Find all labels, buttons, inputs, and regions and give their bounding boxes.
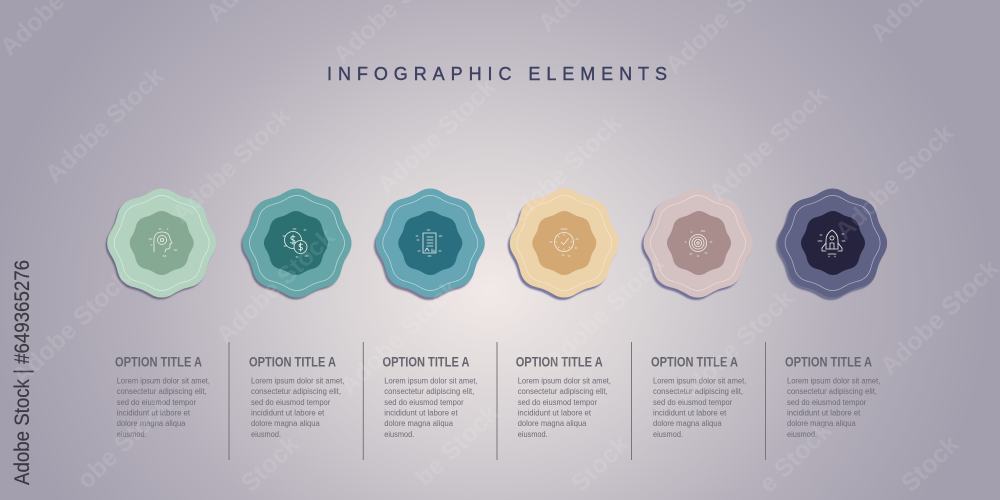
- watermarks: be Stock: [410, 399, 504, 492]
- text block: option 2: [249, 354, 344, 439]
- watermarks: Adobe Stock: [372, 73, 501, 199]
- divider lines: [229, 342, 766, 460]
- watermarks: Adobe Stock: [211, 223, 340, 349]
- text block: option 5: Lorem ipsum dolor sit amet,: [653, 376, 746, 386]
- watermarks: e Stock: [754, 416, 837, 498]
- text block: option 1: eiusmod.: [117, 429, 147, 439]
- text block: option 5: sed do eiusmod tempor: [653, 397, 732, 407]
- text block: option 4: Lorem ipsum dolor sit amet,: [518, 376, 611, 386]
- text block: option 6: OPTION TITLE A: [785, 354, 872, 370]
- text block: option 6: eiusmod.: [787, 429, 817, 439]
- text block: option 6: incididunt ut labore et: [787, 408, 861, 418]
- text block: option 3: Lorem ipsum dolor sit amet,: [384, 376, 478, 386]
- watermarks: Adobe Stock: [670, 284, 799, 410]
- watermarks: Adobe Stock: [40, 62, 169, 188]
- stock id side label: Adobe Stock | #649365276: [11, 260, 34, 485]
- text block: option 5: consectetur adipiscing elit,: [653, 386, 743, 396]
- text block: option 3: dolore magna aliqua: [384, 418, 453, 428]
- icon: document: [416, 230, 442, 256]
- badge 3: document: [374, 188, 485, 300]
- badge 2: coins: [241, 188, 352, 300]
- watermarks: Adobe Stock: [498, 109, 627, 235]
- text block: option 6: dolore magna aliqua: [787, 418, 856, 428]
- text block: option 1: Lorem ipsum dolor sit amet,: [117, 376, 210, 386]
- watermarks: Stock: [896, 430, 964, 498]
- text block: option 3: sed do eiusmod tempor: [384, 397, 464, 407]
- text block: option 2: dolore magna aliqua: [251, 418, 320, 428]
- title: INFOGRAPHIC ELEMENTS: [327, 64, 667, 84]
- text block: option 6: consectetur adipiscing elit,: [787, 386, 877, 396]
- watermarks: Adobe Stock: [167, 102, 296, 228]
- watermarks: Adobe Stock: [540, 249, 669, 375]
- text block: option 2: consectetur adipiscing elit,: [251, 386, 341, 396]
- text block: option 5: dolore magna aliqua: [653, 418, 722, 428]
- watermarks: Stock: [236, 430, 304, 498]
- text block: option 4: sed do eiusmod tempor: [518, 397, 597, 407]
- text block: option 1: incididunt ut labore et: [117, 408, 191, 418]
- text block: option 3: eiusmod.: [384, 429, 414, 439]
- text block: option 4: [516, 354, 611, 439]
- text block: option 1: dolore magna aliqua: [117, 418, 186, 428]
- text block: option 4: eiusmod.: [518, 429, 548, 439]
- text block: option 3: consectetur adipiscing elit,: [384, 386, 474, 396]
- text block: option 6: sed do eiusmod tempor: [787, 397, 866, 407]
- text block: option 6: [785, 354, 880, 439]
- text block: option 1: [115, 354, 210, 439]
- text block: option 4: incididunt ut labore et: [518, 408, 592, 418]
- text block: option 1: OPTION TITLE A: [115, 354, 202, 370]
- badge 5: target: [642, 188, 752, 300]
- text block: option 3: OPTION TITLE A: [382, 354, 470, 370]
- text block: option 2: eiusmod.: [251, 429, 281, 439]
- watermarks: obe Stock: [72, 391, 177, 494]
- text block: option 2: incididunt ut labore et: [251, 408, 325, 418]
- watermarks: Adobe Stock: [704, 81, 833, 207]
- badge 1: head with gear: [106, 188, 216, 300]
- text block: option 3: [382, 354, 478, 439]
- text block: option 1: sed do eiusmod tempor: [117, 397, 196, 407]
- icon: head with gear: [149, 229, 177, 256]
- watermarks: Adobe Stock: [7, 264, 136, 390]
- badge 4: clock: [508, 188, 619, 300]
- text block: option 3: incididunt ut labore et: [384, 408, 458, 418]
- badge 6: rocket: [776, 188, 887, 300]
- text block: option 4: OPTION TITLE A: [516, 354, 603, 370]
- text block: option 4: dolore magna aliqua: [518, 418, 587, 428]
- text block: option 5: [651, 354, 746, 439]
- watermarks: Adobe Stock: [335, 274, 464, 400]
- text block: option 6: Lorem ipsum dolor sit amet,: [787, 376, 880, 386]
- icon: target: [685, 231, 712, 256]
- watermarks: Adobe Stock: [830, 119, 959, 245]
- text block: option 5: incididunt ut labore et: [653, 408, 727, 418]
- icon: rocket: [818, 230, 845, 257]
- text block: option 5: OPTION TITLE A: [651, 354, 738, 370]
- text block: option 5: eiusmod.: [653, 429, 683, 439]
- watermarks: Stock: [566, 430, 634, 498]
- text block: option 2: Lorem ipsum dolor sit amet,: [251, 376, 344, 386]
- text block: option 2: sed do eiusmod tempor: [251, 397, 330, 407]
- icon: coins: [283, 229, 308, 257]
- text block: option 1: consectetur adipiscing elit,: [117, 386, 207, 396]
- text block: option 2: OPTION TITLE A: [249, 354, 336, 370]
- text block: option 4: consectetur adipiscing elit,: [518, 386, 608, 396]
- icon: clock: [550, 229, 578, 256]
